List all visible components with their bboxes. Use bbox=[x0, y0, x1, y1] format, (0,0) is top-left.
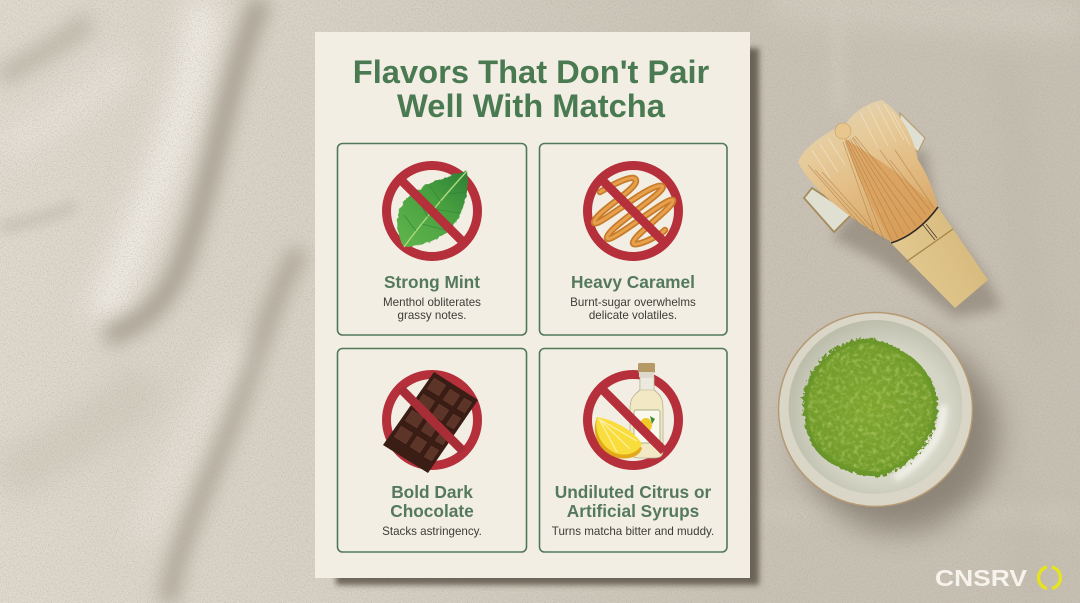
icon: no citrus and syrup bbox=[588, 363, 678, 466]
matcha powder bbox=[803, 338, 938, 477]
description: Menthol obliterates bbox=[383, 296, 481, 309]
panel: bold dark chocolate bbox=[338, 348, 526, 552]
description bbox=[383, 296, 481, 322]
heading: Artificial Syrups bbox=[567, 501, 699, 521]
title: Well With Matcha bbox=[397, 87, 666, 124]
central tine cone bbox=[845, 138, 935, 242]
bowl of matcha bbox=[778, 312, 998, 532]
logo: CNSRV: CNSRV bbox=[935, 565, 1028, 591]
heading: Strong Mint bbox=[384, 272, 480, 292]
description: delicate volatiles. bbox=[589, 309, 677, 322]
whisk shadow bbox=[832, 150, 1002, 318]
description: Turns matcha bitter and muddy. bbox=[552, 525, 714, 538]
icon: no caramel bbox=[588, 166, 678, 256]
icon: no mint bbox=[386, 166, 478, 256]
heading: Bold Dark bbox=[391, 482, 473, 502]
poster panel bbox=[315, 32, 750, 578]
tines bbox=[798, 100, 938, 242]
description bbox=[570, 296, 696, 322]
icon: lemon wedge bbox=[595, 417, 642, 459]
handle mark bbox=[923, 224, 937, 240]
heading: Undiluted Citrus or bbox=[555, 482, 712, 502]
heading: Heavy Caramel bbox=[571, 272, 695, 292]
bowl shadow bbox=[798, 336, 998, 532]
tine knot bbox=[835, 123, 851, 139]
bamboo whisk bbox=[798, 100, 1002, 318]
description: grassy notes. bbox=[398, 309, 466, 322]
icon: bottle bbox=[630, 363, 663, 458]
heading: Chocolate bbox=[390, 501, 474, 521]
tine ring bbox=[891, 207, 938, 243]
icon: no chocolate bbox=[383, 372, 478, 473]
icon: yellow brackets bbox=[1039, 567, 1060, 588]
title bbox=[353, 53, 710, 124]
logo: CNSRV bbox=[935, 565, 1060, 591]
ceramic rest bbox=[804, 113, 925, 232]
panel: heavy caramel bbox=[540, 144, 727, 335]
heading bbox=[555, 482, 712, 521]
description: Burnt-sugar overwhelms bbox=[570, 296, 696, 309]
panel: strong mint bbox=[338, 144, 526, 335]
poster shadow bbox=[336, 48, 759, 585]
description: Stacks astringency. bbox=[382, 525, 482, 538]
heading bbox=[390, 482, 474, 521]
title: Flavors That Don't Pair bbox=[353, 53, 710, 90]
handle bbox=[890, 207, 988, 308]
bowl bbox=[778, 312, 972, 506]
panel: undiluted citrus or artificial syrups bbox=[540, 348, 727, 552]
